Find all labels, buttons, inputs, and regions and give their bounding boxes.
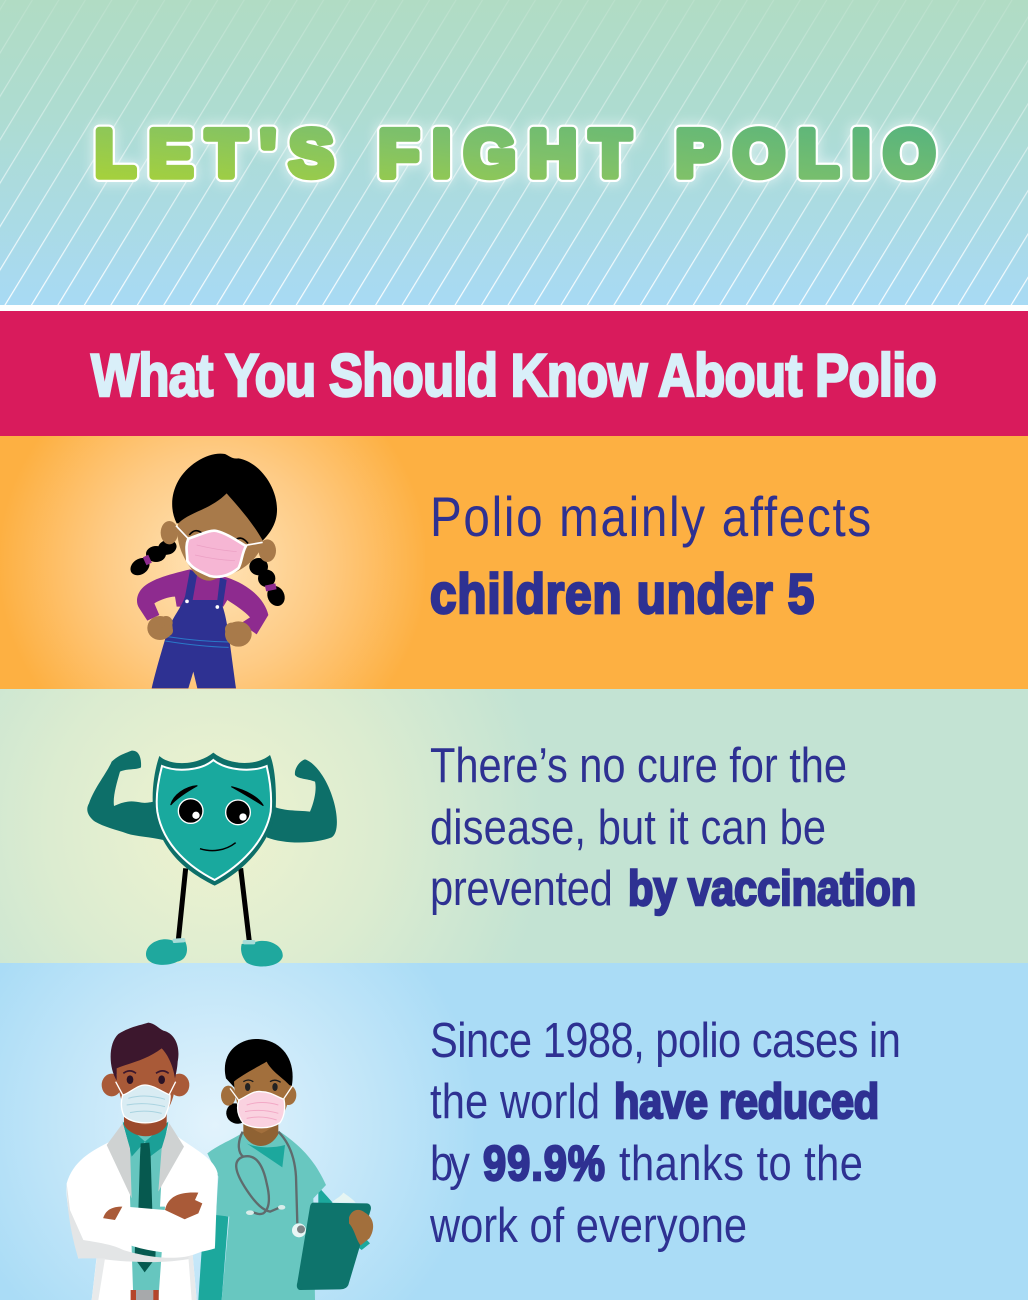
title: LET'S FIGHT POLIO (95, 116, 935, 190)
face (177, 493, 263, 581)
panel: header background (0, 0, 1028, 311)
neck and head (124, 1113, 167, 1136)
text: progress: thanks to the (619, 1136, 863, 1191)
heading: What You Should Know About Polio (91, 342, 937, 409)
text: progress: the world (430, 1074, 600, 1129)
left braid (127, 538, 178, 579)
text: progress: Since 1988, polio cases in (430, 1013, 901, 1068)
hands (147, 616, 252, 647)
clipboard (332, 1193, 356, 1203)
overalls (152, 570, 236, 688)
icon: shield mascot (87, 751, 337, 967)
nurse (198, 1039, 373, 1300)
icon: girl wearing mask (127, 454, 288, 688)
panel: children (0, 436, 1028, 689)
stethoscope (236, 1132, 297, 1223)
text: vaccination: There’s no cure for the (430, 738, 847, 793)
text: vaccination (430, 738, 916, 916)
title: LET'S FIGHT POLIO (95, 116, 935, 190)
shield (153, 753, 276, 886)
ears (161, 521, 178, 544)
text: progress: by (430, 1136, 470, 1191)
title: LET'S FIGHT POLIO (95, 116, 935, 190)
crossed arms (165, 1193, 202, 1222)
doctor (66, 1023, 218, 1300)
mask (176, 526, 263, 545)
text: progress: work of everyone (429, 1198, 747, 1253)
text: children: Polio mainly affects (430, 486, 871, 549)
hair back (172, 454, 277, 542)
arms (87, 751, 163, 840)
shoes (146, 939, 283, 967)
text: progress: have reduced (614, 1074, 879, 1129)
text: vaccination: by vaccination (628, 861, 916, 916)
eyes (178, 799, 203, 823)
icon: doctor and nurse (66, 1023, 373, 1300)
text: vaccination: disease, but it can be (430, 800, 826, 855)
mouth (200, 843, 236, 851)
text: progress: 99.9% (483, 1136, 605, 1191)
text: children: children under 5 (430, 563, 814, 626)
eyebrows (171, 786, 263, 806)
panel: vaccination (0, 689, 1028, 967)
text: progress (429, 1013, 901, 1253)
body shirt (137, 569, 268, 634)
panel: progress (0, 963, 1028, 1300)
right braid (249, 558, 288, 609)
text: children (430, 486, 871, 626)
legs (178, 868, 249, 942)
panel: pink heading band (0, 311, 1028, 436)
text: vaccination: prevented (430, 861, 613, 916)
